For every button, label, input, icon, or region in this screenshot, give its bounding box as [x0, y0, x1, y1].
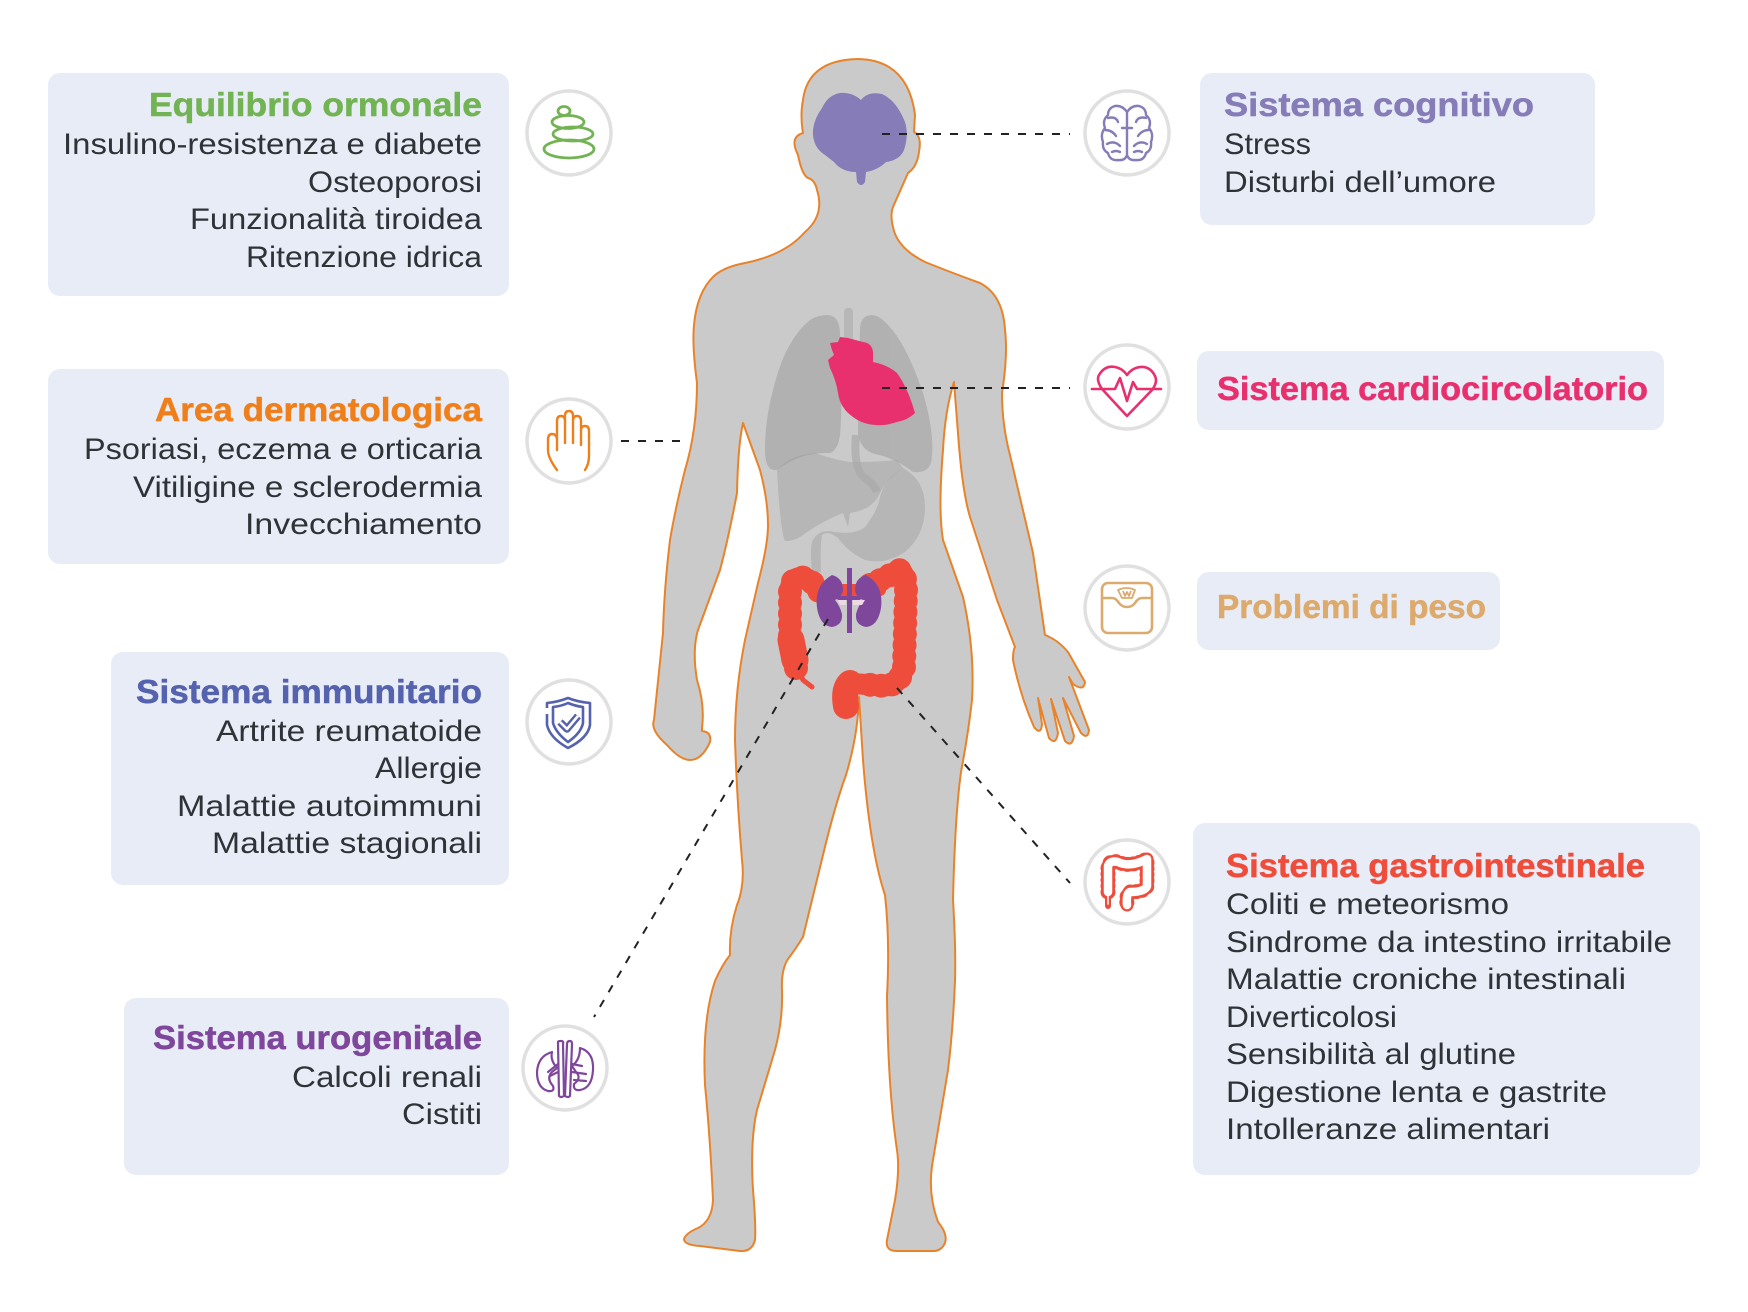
list: gastrointestinale: Sensibilità al glutine — [1226, 1038, 1516, 1071]
icon: intestine — [1085, 840, 1169, 924]
trachea — [844, 308, 853, 368]
list: gastrointestinale: Digestione lenta e gastrite — [1226, 1076, 1607, 1109]
heading: sistema cardiocircolatorio: Sistema cardiocircolatorio — [1217, 370, 1648, 407]
list: ormonale: Ritenzione idrica — [246, 241, 482, 274]
heading: sistema cognitivo: Sistema cognitivo — [1224, 86, 1534, 123]
liver — [777, 453, 903, 541]
list: gastrointestinale — [1226, 888, 1672, 1146]
list: cognitivo: Stress — [1224, 128, 1311, 161]
icon: hand — [527, 399, 611, 483]
list: urogenitale — [292, 1061, 482, 1131]
panel: sistema immunitario — [111, 652, 509, 885]
list: dermatologica: Invecchiamento — [245, 508, 482, 541]
list: cognitivo — [1224, 128, 1496, 199]
organ: colon — [790, 570, 906, 706]
list: ormonale: Funzionalità tiroidea — [190, 203, 482, 236]
list: gastrointestinale: Diverticolosi — [1226, 1001, 1397, 1034]
connector: brain to cognitive icon — [882, 133, 1070, 135]
panel: problemi di peso — [1197, 572, 1500, 650]
panel: area dermatologica — [48, 369, 509, 564]
esophagus — [855, 435, 877, 492]
list: gastrointestinale: Intolleranze alimentari — [1226, 1113, 1550, 1146]
connector: skin icon to body — [621, 440, 684, 442]
stomach — [811, 468, 925, 572]
lungs — [765, 315, 932, 472]
connector: colon to gastro icon — [897, 688, 1070, 883]
heading: sistema immunitario: Sistema immunitario — [136, 673, 482, 710]
human body figure — [653, 59, 1089, 1251]
panel: sistema cognitivo — [1200, 73, 1595, 225]
list: gastrointestinale: Coliti e meteorismo — [1226, 888, 1509, 921]
icon: shield with check — [527, 680, 611, 764]
list: gastrointestinale: Malattie croniche intestinali — [1226, 963, 1626, 996]
icon: heart with pulse — [1085, 345, 1169, 429]
heading: problemi di peso: Problemi di peso — [1217, 588, 1486, 625]
connector: kidneys to urogenital icon — [594, 619, 828, 1017]
list: ormonale: Osteoporosi — [308, 166, 482, 199]
icon: stacked stones — [527, 91, 611, 175]
panel: equilibrio ormonale — [48, 73, 509, 296]
icon: brain — [1085, 91, 1169, 175]
connector: heart to cardio icon — [882, 387, 1070, 389]
body silhouette — [653, 59, 1089, 1251]
list: immunitario — [177, 715, 482, 860]
list: urogenitale: Calcoli renali — [292, 1061, 482, 1094]
list: immunitario: Malattie stagionali — [212, 827, 482, 860]
list: gastrointestinale: Sindrome da intestino irritabile — [1226, 926, 1672, 959]
heading: equilibrio ormonale: Equilibrio ormonale — [149, 86, 482, 123]
heading: area dermatologica: Area dermatologica — [155, 391, 483, 428]
organ: brain — [813, 93, 907, 185]
list: dermatologica: Psoriasi, eczema e orticaria — [84, 433, 482, 466]
list: urogenitale: Cistiti — [402, 1098, 482, 1131]
organ: heart — [828, 337, 915, 425]
organ: kidneys — [817, 568, 881, 633]
list: ormonale — [63, 128, 482, 274]
list: ormonale: Insulino-resistenza e diabete — [63, 128, 482, 161]
panel: sistema gastrointestinale — [1193, 823, 1700, 1175]
list: immunitario: Malattie autoimmuni — [177, 790, 482, 823]
list: immunitario: Artrite reumatoide — [216, 715, 482, 748]
icon: weight scale — [1085, 566, 1169, 650]
list: cognitivo: Disturbi dell’umore — [1224, 166, 1496, 199]
list: immunitario: Allergie — [375, 752, 482, 785]
list: dermatologica: Vitiligine e sclerodermia — [133, 471, 482, 504]
heading: sistema urogenitale: Sistema urogenitale — [153, 1019, 482, 1056]
panel: sistema cardiocircolatorio — [1197, 351, 1664, 430]
icon: kidneys — [523, 1026, 607, 1110]
panel: sistema urogenitale — [124, 998, 509, 1175]
heading: sistema gastrointestinale: Sistema gastrointestinale — [1226, 847, 1645, 884]
list: dermatologica — [84, 433, 482, 541]
